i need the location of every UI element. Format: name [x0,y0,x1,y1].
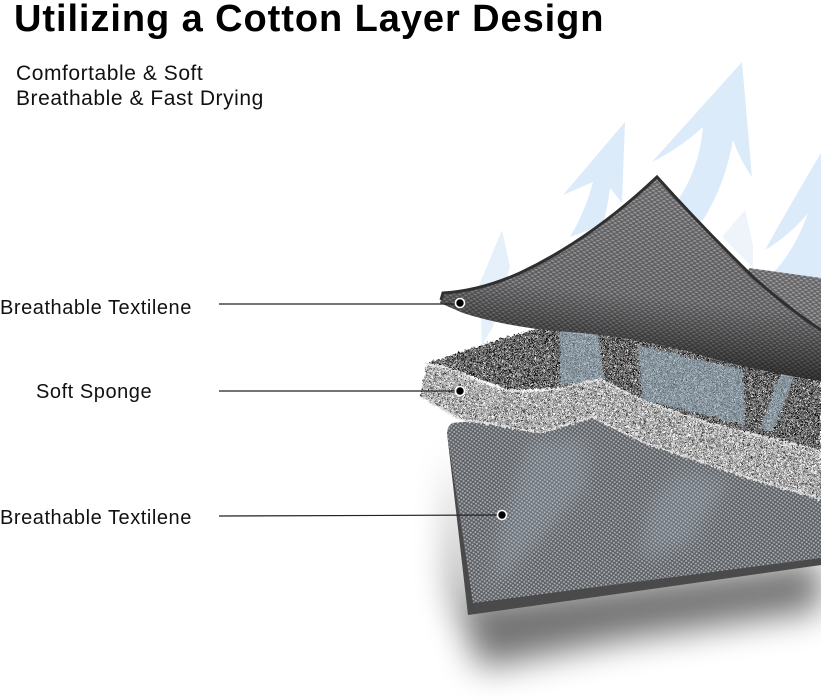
arrow: pale airflow [722,210,753,268]
label: soft sponge: Soft Sponge [36,381,152,403]
arrow: large airflow [652,62,752,235]
airflow through sponge [560,325,797,430]
text block: benefits [16,62,264,110]
middle layer: soft sponge [415,355,821,505]
sponge back surface [425,328,821,450]
arrow: middle airflow [563,122,625,237]
text block: benefits: Breathable & Fast Drying [16,87,264,110]
top layer: breathable textilene [440,177,821,381]
layer behind top sheet [745,268,821,345]
bottom layer: breathable textilene [447,410,821,615]
label: top breathable textilene: Breathable Textilene [0,297,192,319]
airflow through bottom layer [490,440,730,590]
label: soft sponge [36,381,464,403]
label: top breathable textilene [0,297,464,319]
label: bottom breathable textilene [0,507,506,529]
arrow: right airflow [765,153,821,280]
airflow arrows [480,62,821,345]
text block: benefits: Comfortable & Soft [16,62,203,85]
arrow: left airflow [480,230,510,345]
shadow under bottom layer [452,450,821,668]
label: bottom breathable textilene: Breathable Textilene [0,507,192,529]
